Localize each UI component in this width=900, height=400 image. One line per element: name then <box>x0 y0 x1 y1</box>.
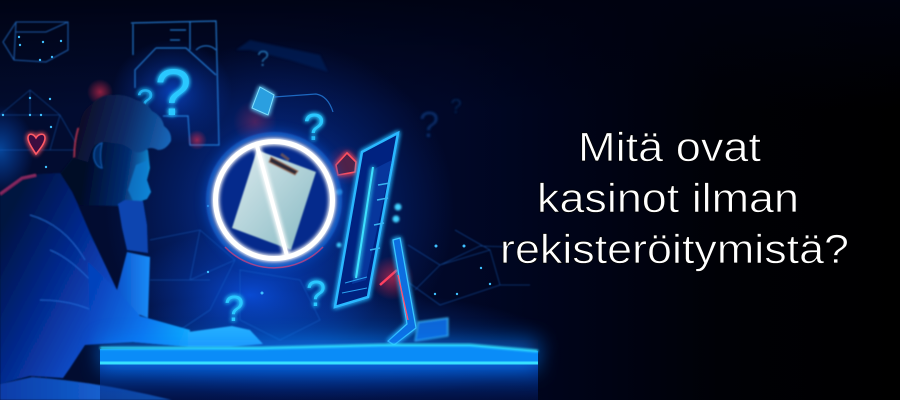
geometric box: left wireframe <box>3 22 68 62</box>
no-sign ring and slash <box>216 142 332 258</box>
person: sleeve to keyboard <box>88 262 190 347</box>
monitor <box>335 133 398 307</box>
geometric box: central frame <box>131 21 219 145</box>
title: Mitä ovat <box>578 124 762 170</box>
person: lit nose and cheek <box>128 160 151 203</box>
title: rekisteröitymistä? <box>500 226 849 272</box>
red glow accents <box>87 79 414 300</box>
monitor stand <box>388 238 448 345</box>
icon: neon heart <box>28 134 45 154</box>
network lines <box>0 90 530 340</box>
person: ear <box>94 143 102 168</box>
person: neck and face <box>58 128 151 206</box>
question marks: ? <box>224 288 244 329</box>
person <box>0 95 263 400</box>
person: hair <box>74 95 171 162</box>
person: thigh <box>0 377 172 400</box>
person: hoodie folds <box>30 215 110 320</box>
decorative cyan blobs <box>336 189 402 248</box>
question marks: ? <box>303 107 325 149</box>
clipboard <box>232 150 316 250</box>
icon: dice <box>252 87 274 115</box>
person: propped forearm <box>115 252 150 318</box>
title <box>500 124 849 272</box>
person: shoulder rim <box>0 175 36 194</box>
neon desk <box>100 340 538 400</box>
person: red rim light <box>74 128 78 157</box>
network nodes <box>2 36 491 295</box>
no-sign disc <box>204 130 344 270</box>
title: kasinot ilman <box>537 175 799 221</box>
question marks: ? <box>306 273 326 314</box>
question marks <box>137 46 462 329</box>
dice trail line <box>274 94 333 112</box>
icon: neon red tag <box>336 153 356 175</box>
question marks: ? <box>419 104 439 145</box>
person: hoodie torso <box>0 173 190 384</box>
question marks: ? <box>450 96 462 118</box>
question marks: ? <box>155 55 191 129</box>
person: typing hand <box>188 326 263 347</box>
question marks: ? <box>137 84 153 117</box>
question marks: ? <box>257 46 269 71</box>
dim arc shape <box>236 40 328 72</box>
person: hand at chin <box>118 200 148 253</box>
